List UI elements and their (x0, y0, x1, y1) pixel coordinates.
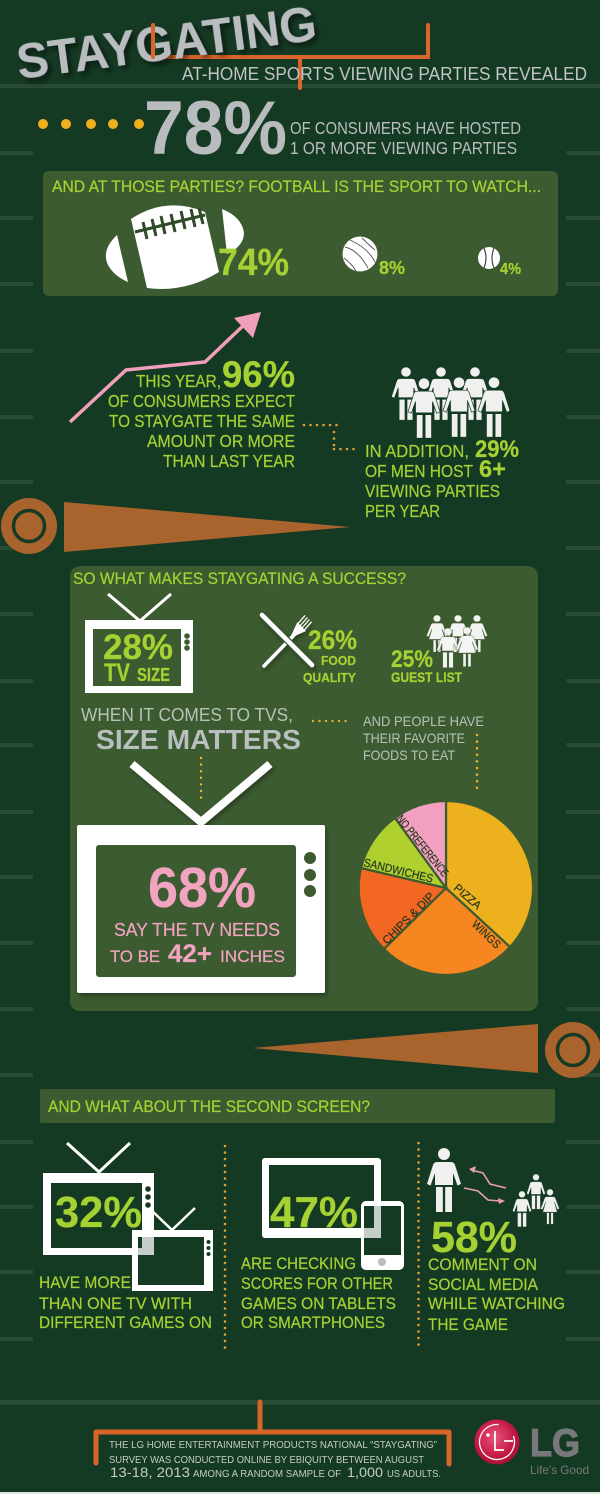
stat: 96% expect to staygate: THAN LAST YEAR (163, 451, 295, 471)
icon: large TV with 68%: 42+ (168, 940, 212, 968)
heading: size matters: WHEN IT COMES TO TVS, (81, 704, 293, 725)
stat: 96% expect to staygate: OF CONSUMERS EXPECT (108, 391, 295, 411)
stat: 29% of men host 6+: 29% (475, 436, 519, 463)
text: survey note: AMONG A RANDOM SAMPLE OF (193, 1469, 341, 1480)
panel: second screen heading (40, 1089, 555, 1123)
icon: five yellow dots (38, 119, 144, 129)
icon: large TV with 68%: TO BE (110, 947, 160, 966)
icon: small TV with 28%: SIZE (137, 665, 170, 685)
stat: 58% comment on social media: THE GAME (428, 1315, 508, 1334)
stat: 29% of men host 6+: VIEWING PARTIES (365, 481, 500, 501)
chart: favorite foods pie: PIZZA (451, 882, 483, 912)
stat: 58% comment on social media (428, 1213, 565, 1334)
stat: food quality 26%: FOOD (321, 653, 356, 668)
stat: food quality 26%: 26% (308, 625, 357, 655)
stat: 78% of consumers: OF CONSUMERS HAVE HOSTED (290, 118, 521, 138)
stat: 96% expect to staygate: TO STAYGATE THE SAME (109, 411, 295, 431)
icon: small TV with 28% (85, 594, 193, 693)
divider: brown whistle right (253, 1022, 600, 1078)
icon: LG logo: LG (530, 1422, 580, 1465)
icon: group of six people (391, 367, 510, 438)
stat: guest list 25%: 25% (391, 646, 433, 673)
icon: tablet and phone with 47% (262, 1158, 404, 1270)
text: checking scores: GAMES ON TABLETS (241, 1294, 396, 1313)
divider: brown whistle left (1, 498, 350, 554)
panel: second screen heading: AND WHAT ABOUT THE SECOND SCREEN? (48, 1098, 370, 1116)
stat: 29% of men host 6+: 6+ (479, 456, 506, 483)
stat: baseball 4%: 4% (500, 261, 521, 278)
stat: football 74%: 74% (218, 242, 289, 284)
icon: knife and fork (262, 615, 312, 666)
chart: favorite foods pie: WINGS (469, 919, 503, 952)
icon: guests (426, 615, 488, 668)
chart: favorite foods pie (359, 801, 533, 975)
icon: TVs with 32% (43, 1143, 213, 1291)
subtitle: AT-HOME SPORTS VIEWING PARTIES REVEALED (182, 64, 587, 84)
icon: goal post left upright (151, 25, 155, 57)
icon: baseball (478, 247, 500, 269)
text: survey note: THE LG HOME ENTERTAINMENT PRODUCTS NATIONAL “STAYGATING” (109, 1439, 437, 1451)
icon: basketball (342, 236, 378, 272)
stat: 96% expect to staygate: AMOUNT OR MORE (147, 431, 295, 451)
stat: guest list 25%: GUEST LIST (391, 670, 463, 685)
text: survey note: SURVEY WAS CONDUCTED ONLINE BY EBIQUITY BETWEEN AUGUST (109, 1454, 425, 1466)
text: survey note (109, 1439, 441, 1480)
panel: football is the sport to watch (43, 171, 558, 296)
icon: football (106, 205, 244, 289)
chart: favorite foods pie: NO PREFERENCE (394, 813, 450, 879)
text: favorite foods: FOODS TO EAT (363, 747, 455, 763)
icon: tablet and phone with 47%: 47% (270, 1188, 358, 1237)
divider: dotted column (417, 1143, 420, 1350)
icon: small TV with 28%: 28% (103, 628, 173, 667)
icon: large TV with 68%: INCHES (220, 947, 285, 966)
text: more than one TV: HAVE MORE (39, 1273, 131, 1292)
text: more than one TV (39, 1273, 212, 1332)
connector: dotted to foods (313, 720, 352, 722)
stat: food quality 26% (303, 625, 357, 685)
stat: 29% of men host 6+: IN ADDITION, (365, 441, 469, 461)
divider: dotted column (224, 1146, 226, 1350)
text: favorite foods: THEIR FAVORITE (363, 730, 465, 746)
text: survey note: 13-18, 2013 (110, 1464, 190, 1480)
stat: 78% of consumers (144, 86, 521, 171)
icon: large TV with 68%: SAY THE TV NEEDS (114, 920, 280, 940)
text: more than one TV: THAN ONE TV WITH (39, 1294, 192, 1313)
stat: 78% of consumers: 78% (144, 86, 287, 171)
text: checking scores: ARE CHECKING (241, 1254, 356, 1273)
connector: dotted to pie (476, 735, 478, 794)
panel: what makes staygating a success (70, 566, 538, 1011)
stat: 96% expect to staygate (108, 354, 295, 471)
stat: 96% expect to staygate: 96% (222, 354, 295, 395)
icon: person commenting with others (427, 1148, 559, 1227)
icon: LG logo: Life's Good (530, 1463, 589, 1477)
stat: 29% of men host 6+ (365, 436, 519, 521)
icon: LG logo (474, 1420, 589, 1477)
text: survey note: US ADULTS. (387, 1469, 441, 1480)
connector: dotted to TV (200, 758, 202, 803)
stat: guest list 25% (391, 646, 463, 685)
stat: food quality 26%: QUALITY (303, 670, 356, 685)
text: checking scores: SCORES FOR OTHER (241, 1274, 393, 1293)
connector: dotted line (304, 425, 358, 449)
panel heading: AND AT THOSE PARTIES? FOOTBALL IS THE SPORT TO WATCH... (52, 178, 541, 196)
stat: 58% comment on social media: COMMENT ON (428, 1255, 537, 1274)
text: survey note: 1,000 (347, 1464, 383, 1480)
icon: small TV with 28%: TV (104, 659, 130, 687)
chart: favorite foods pie: CHIPS & DIP (381, 890, 437, 947)
stat: 96% expect to staygate: THIS YEAR, (136, 371, 221, 391)
stat: 58% comment on social media: SOCIAL MEDIA (428, 1275, 539, 1294)
heading: size matters: SIZE MATTERS (96, 724, 301, 755)
stat: basketball 8%: 8% (379, 258, 405, 278)
text: checking scores: OR SMARTPHONES (241, 1313, 385, 1332)
icon: TVs with 32%: 32% (55, 1188, 142, 1237)
icon: large TV with 68% (77, 764, 325, 993)
stat: 29% of men host 6+: PER YEAR (365, 501, 440, 521)
text: favorite foods: AND PEOPLE HAVE (363, 713, 484, 729)
icon: footer orange goal post (96, 1402, 449, 1464)
stat: 58% comment on social media: 58% (431, 1213, 517, 1262)
text: more than one TV: DIFFERENT GAMES ON (39, 1313, 212, 1332)
icon: large TV with 68%: 68% (148, 856, 256, 920)
icon: orange goal post (153, 25, 428, 88)
chart: favorite foods pie: SANDWICHES (362, 857, 434, 886)
text: checking scores (241, 1254, 396, 1332)
stat: 58% comment on social media: WHILE WATCHING (428, 1294, 565, 1313)
text: favorite foods (363, 713, 484, 763)
stat: 29% of men host 6+: OF MEN HOST (365, 461, 473, 481)
heading: size matters (81, 704, 301, 755)
stat: 78% of consumers: 1 OR MORE VIEWING PARTIES (290, 138, 517, 158)
arrow: pink rising trend (70, 312, 261, 422)
panel heading: SO WHAT MAKES STAYGATING A SUCCESS? (73, 570, 406, 588)
